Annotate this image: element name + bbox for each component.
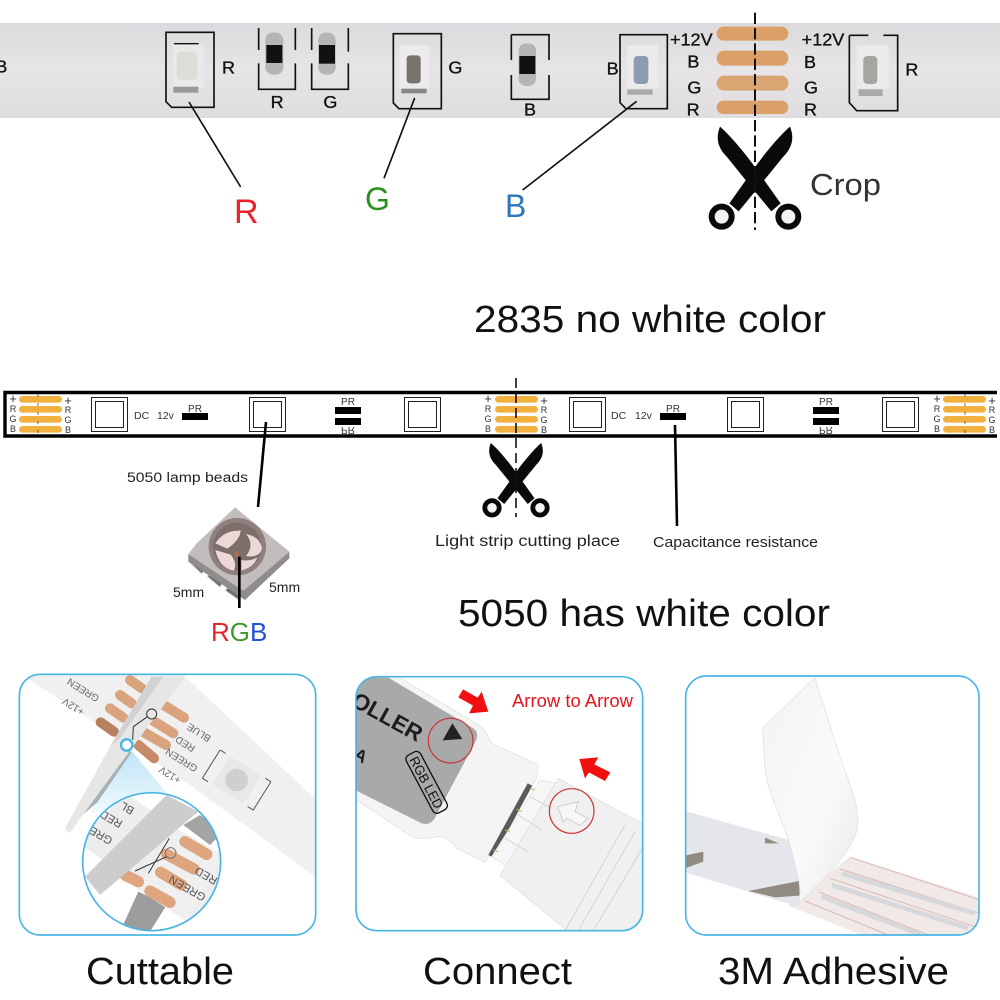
- right pads: B: [989, 425, 995, 435]
- text arrow to arrow: Arrow to Arrow: [512, 691, 634, 711]
- resistor G: [312, 28, 348, 112]
- pointer to lamp bead: [258, 422, 266, 507]
- 5050 chip: [188, 507, 289, 608]
- panel: adhesive: [685, 676, 982, 935]
- LED B: [607, 35, 667, 109]
- scissors icon: [712, 127, 798, 227]
- middle pads: B: [485, 424, 491, 434]
- peeled backing left: [685, 811, 808, 906]
- text capacitance: Capacitance resistance: [653, 535, 818, 551]
- magnified inset: RED: [98, 807, 125, 829]
- right pads: G: [933, 414, 941, 424]
- red arrow down-right: [458, 689, 488, 713]
- pointer line R: [189, 102, 241, 187]
- small blue circle: [121, 739, 132, 751]
- left pads: G: [9, 414, 17, 424]
- LED B: B: [607, 59, 619, 79]
- text 5mm left: 5mm: [173, 584, 204, 600]
- red circles: [428, 718, 594, 833]
- resistor R: R: [271, 92, 284, 112]
- chip top: [188, 507, 289, 591]
- pointer line G: [384, 98, 415, 178]
- tape streaks: [822, 873, 975, 935]
- 5050 strip diagram: [5, 391, 997, 436]
- panel frame: [19, 674, 316, 935]
- strip labels: BLUE: [185, 720, 213, 743]
- pads and voltage labels: +12V: [802, 29, 844, 49]
- scissors small: [485, 443, 547, 515]
- panel: connect: [348, 675, 645, 932]
- panel frame: [686, 676, 979, 935]
- controller grey label: [352, 678, 477, 824]
- left pads: G: [64, 415, 72, 425]
- strip right half components: [511, 13, 918, 230]
- pointer to RGB: [235, 557, 243, 608]
- LED R: [166, 32, 235, 107]
- blade underside: [83, 752, 132, 814]
- middle pads: [484, 391, 548, 435]
- strip left half components: [0, 28, 462, 187]
- 2835 LED strip photo: [0, 13, 1000, 230]
- PR components: PR: [341, 424, 355, 435]
- magnified inset: [82, 792, 222, 932]
- label B: B: [505, 188, 526, 224]
- pads and voltage labels: G: [804, 77, 818, 97]
- left pads: +: [9, 391, 17, 406]
- strip labels: +12V: [60, 695, 87, 717]
- middle pads: B: [541, 425, 547, 435]
- peeling tape: [762, 678, 858, 905]
- triangle mark: [443, 723, 462, 740]
- LED R right: R: [905, 59, 918, 79]
- controller text: A: [350, 744, 371, 767]
- chip legs: [189, 557, 243, 600]
- middle pads: R: [485, 404, 492, 414]
- right pads: +: [988, 393, 996, 408]
- left pads: +: [64, 393, 72, 408]
- label Crop: Crop: [810, 167, 881, 202]
- strip labels: GREEN: [164, 745, 200, 773]
- strip lines: [805, 857, 980, 935]
- chip lens: [209, 518, 266, 575]
- middle pads: G: [540, 415, 548, 425]
- chip center: [234, 552, 239, 556]
- magnified inset: RED: [193, 864, 220, 886]
- strip labels: GREEN: [66, 675, 102, 703]
- chip side: [188, 552, 289, 600]
- right pads: +: [933, 391, 941, 406]
- pads and voltage labels: B: [687, 51, 699, 71]
- pads and voltage labels: G: [687, 77, 701, 97]
- pads and voltage labels: R: [687, 99, 700, 119]
- pin gap: [488, 783, 532, 858]
- right pads: [933, 391, 996, 435]
- DC 12v labels: [134, 410, 653, 422]
- strip labels: [60, 675, 213, 785]
- RGB LED badge: RGB LED: [406, 754, 446, 811]
- strip connector: [500, 778, 645, 932]
- chip dies: [215, 531, 262, 571]
- PR components: PR: [188, 404, 202, 415]
- text 5050 lamp beads: 5050 lamp beads: [127, 470, 248, 485]
- right pads: G: [988, 415, 996, 425]
- LED R right: [849, 35, 918, 111]
- left pads: [9, 391, 72, 435]
- left pads: R: [10, 404, 17, 414]
- PR components: PR: [666, 404, 680, 415]
- blue magnify cone: [90, 750, 167, 813]
- right pads: R: [934, 404, 941, 414]
- left pads: R: [65, 405, 72, 415]
- resistor B: B: [524, 99, 536, 119]
- resistor B: [511, 35, 549, 119]
- left pads: B: [10, 424, 16, 434]
- left pads: B: [65, 425, 71, 435]
- lamp bead squares: [92, 398, 918, 432]
- resistor G: G: [323, 92, 337, 112]
- strip copper side: [788, 857, 982, 935]
- blade: [65, 677, 185, 833]
- resistor R: [259, 28, 295, 112]
- red arrow up-left: [579, 757, 610, 781]
- strip labels: RED: [174, 733, 198, 753]
- cut line dashed: [752, 13, 758, 230]
- controller text: OLLER: [348, 687, 427, 747]
- middle pads: +: [484, 391, 492, 406]
- strip body: [0, 23, 1000, 118]
- pads and voltage labels: B: [804, 52, 816, 72]
- text cutting place: Light strip cutting place: [435, 533, 620, 550]
- right pads: R: [989, 405, 996, 415]
- strip outline: [5, 392, 997, 436]
- middle pads: G: [484, 414, 492, 424]
- strip LED: [202, 750, 271, 810]
- LED R: R: [222, 57, 235, 77]
- middle pads: R: [541, 405, 548, 415]
- pin tabs: [492, 780, 558, 868]
- panel frame: [356, 677, 643, 931]
- pads and voltage labels: +12V: [670, 29, 713, 49]
- middle pads: +: [540, 393, 548, 408]
- pin tips: [493, 788, 535, 852]
- heading 2835: 2835 no white color: [474, 299, 826, 341]
- DC 12v labels: 12v: [635, 410, 653, 422]
- magnified inset: GRE: [87, 823, 115, 846]
- PR components: PR: [819, 397, 833, 408]
- DC 12v labels: DC: [611, 410, 627, 422]
- heading 5050: 5050 has white color: [458, 593, 830, 635]
- controller body: [352, 675, 538, 862]
- LED G: G: [448, 57, 462, 77]
- right pads: B: [934, 424, 940, 434]
- pads and voltage labels: [670, 27, 844, 119]
- arrow mould: [558, 802, 588, 826]
- strip labels: +12V: [157, 763, 183, 785]
- label G: G: [365, 181, 390, 217]
- small scissor mark: [133, 709, 157, 740]
- text 5mm right: 5mm: [269, 579, 300, 595]
- pointer line B: [523, 101, 637, 190]
- DC 12v labels: DC: [134, 410, 150, 422]
- pointer to capacitance: [675, 425, 677, 526]
- PR components: PR: [819, 424, 833, 435]
- PR components: PR: [341, 397, 355, 408]
- magnified inset: GREEN: [167, 872, 208, 903]
- RGB label: RGB: [211, 617, 267, 647]
- DC 12v labels: 12v: [157, 410, 175, 422]
- controller text: [356, 694, 422, 764]
- caption Connect: Connect: [423, 951, 572, 993]
- panel: cuttable: [19, 672, 320, 935]
- PR components: [182, 397, 839, 435]
- grey marks: [685, 838, 800, 897]
- pads and voltage labels: R: [804, 99, 817, 119]
- LED G: [393, 34, 462, 109]
- caption Cuttable: Cuttable: [86, 951, 234, 993]
- pads on strip: [101, 680, 184, 758]
- label R: R: [234, 193, 259, 231]
- cut line 5050: [515, 378, 517, 517]
- caption 3M Adhesive: 3M Adhesive: [718, 951, 949, 993]
- strip band: [30, 672, 320, 880]
- magnified inset: BL: [118, 799, 136, 816]
